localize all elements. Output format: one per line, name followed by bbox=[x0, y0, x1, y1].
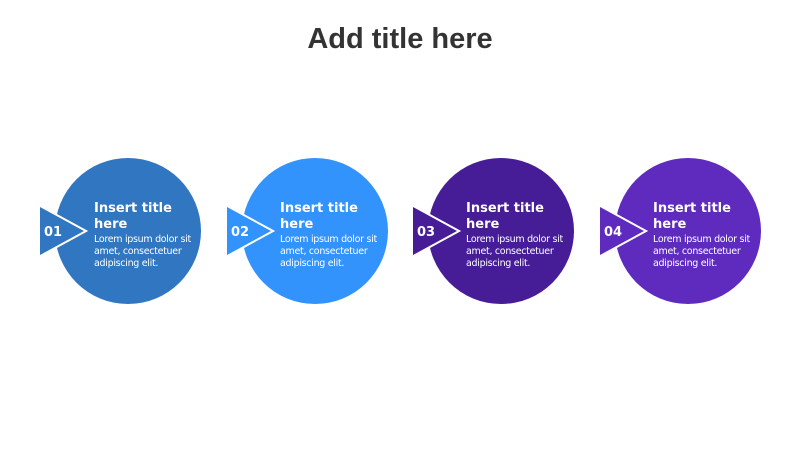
step 01 shape bbox=[40, 158, 201, 304]
step 01 text: amet, consectetuer bbox=[94, 246, 181, 257]
step 04 text: adipiscing elit. bbox=[653, 258, 717, 269]
step 02 shape: 02 bbox=[231, 225, 249, 240]
step 02 text: here bbox=[280, 217, 313, 232]
step 02 text: Insert title bbox=[280, 201, 358, 216]
step 01 text: Lorem ipsum dolor sit bbox=[94, 234, 191, 245]
step 02 text: amet, consectetuer bbox=[280, 246, 367, 257]
step 04 text: amet, consectetuer bbox=[653, 246, 740, 257]
step 04 text: Lorem ipsum dolor sit bbox=[653, 234, 750, 245]
step 04 shape bbox=[600, 158, 761, 304]
step 01 shape: 01 bbox=[44, 225, 62, 240]
step 01 text: Insert title bbox=[94, 201, 172, 216]
step 01 text: here bbox=[94, 217, 127, 232]
step 03 text bbox=[466, 201, 563, 269]
title: Add title here bbox=[307, 23, 493, 55]
step 03 text: adipiscing elit. bbox=[466, 258, 530, 269]
step 02 text bbox=[280, 201, 377, 269]
step 03 text: Insert title bbox=[466, 201, 544, 216]
step 02 text: Lorem ipsum dolor sit bbox=[280, 234, 377, 245]
step 01 text bbox=[94, 201, 191, 269]
step 03 text: amet, consectetuer bbox=[466, 246, 553, 257]
step 03 text: here bbox=[466, 217, 499, 232]
step 03 text: Lorem ipsum dolor sit bbox=[466, 234, 563, 245]
step 03 shape bbox=[413, 158, 574, 304]
step 04 shape: 04 bbox=[604, 225, 622, 240]
step 02 text: adipiscing elit. bbox=[280, 258, 344, 269]
step 04 text: Insert title bbox=[653, 201, 731, 216]
step 03 shape: 03 bbox=[417, 225, 435, 240]
step 04 text bbox=[653, 201, 750, 269]
step 02 shape bbox=[227, 158, 388, 304]
step 04 text: here bbox=[653, 217, 686, 232]
step 01 text: adipiscing elit. bbox=[94, 258, 158, 269]
